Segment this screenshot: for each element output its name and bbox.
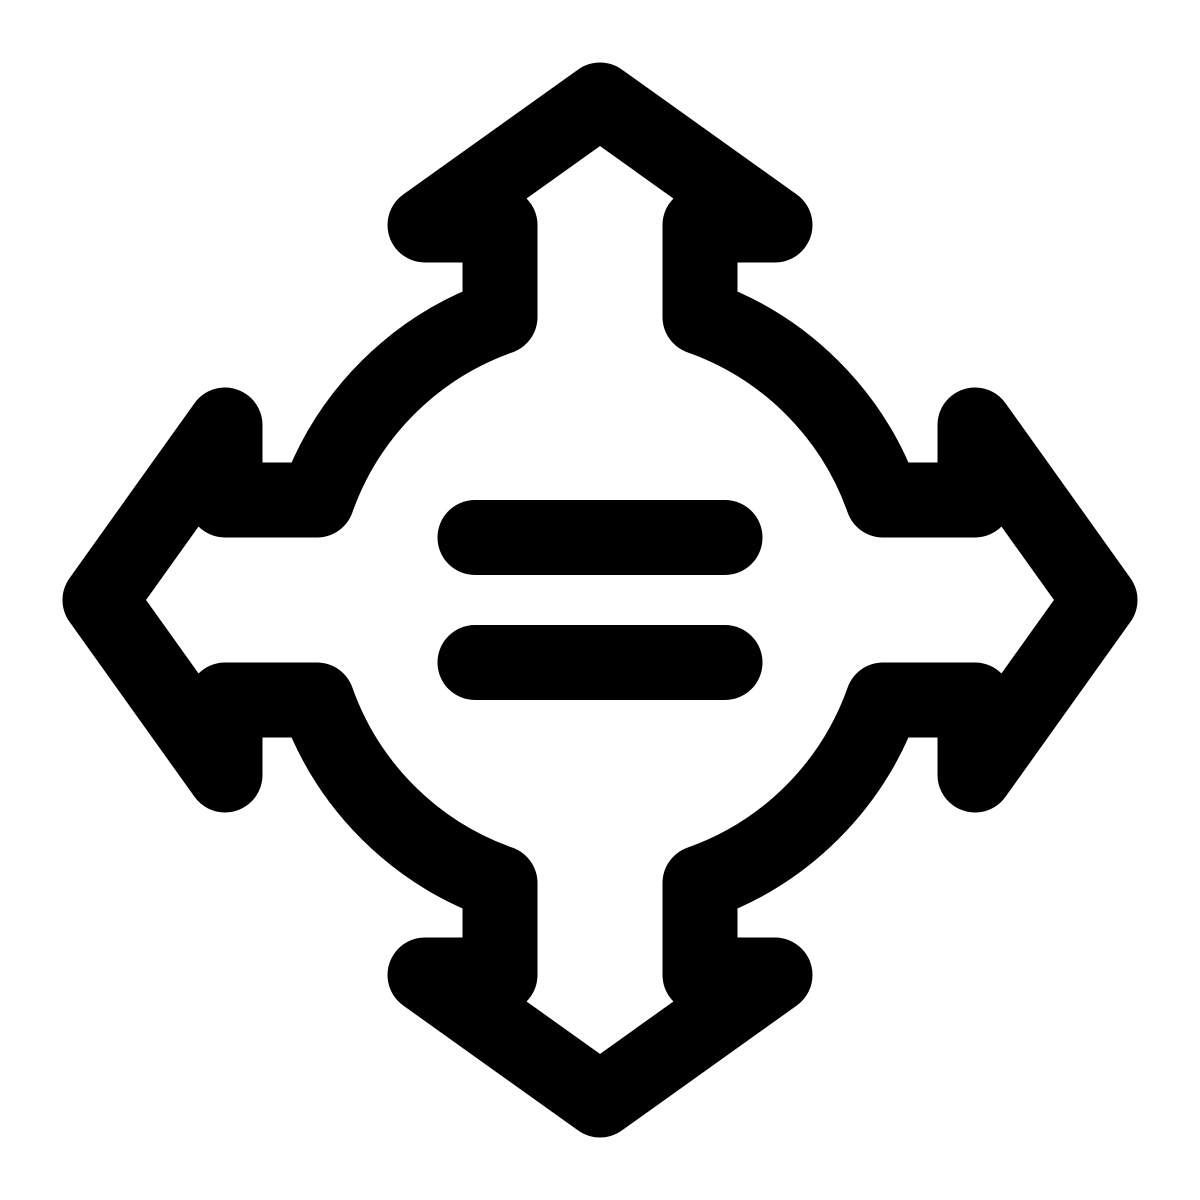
equals sign: bottom bar [475, 625, 725, 700]
equals sign: top bar [475, 500, 725, 575]
icon: equals sign [475, 538, 725, 662]
icon: four-way arrow outline [100, 100, 1100, 1100]
